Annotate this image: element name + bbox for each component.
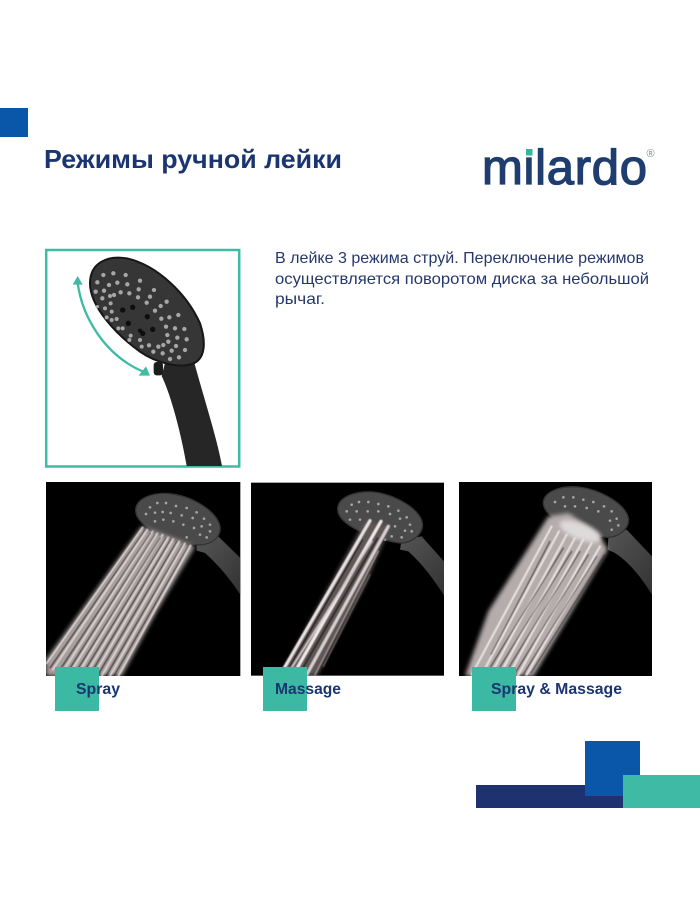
title: Режимы ручной лейки bbox=[44, 144, 342, 174]
photo: spray and massage mode bbox=[459, 482, 652, 676]
icon: shower handle bbox=[162, 357, 222, 466]
logo: milardo: ® bbox=[646, 148, 655, 160]
label: Spray bbox=[55, 667, 120, 711]
label: Spray: Spray bbox=[76, 681, 120, 698]
panel: shower head with rotation arrow bbox=[46, 250, 239, 466]
description text: рычаг. bbox=[275, 291, 325, 308]
decorative corner square bbox=[0, 108, 28, 137]
label: Spray & Massage: Spray & Massage bbox=[491, 681, 622, 698]
label: Massage bbox=[263, 667, 341, 711]
label: Spray & Massage bbox=[472, 667, 622, 711]
logo: milardo: milardo bbox=[482, 141, 647, 195]
label: Massage: Massage bbox=[275, 681, 341, 698]
description text: В лейке 3 режима струй. Переключение режимов bbox=[275, 250, 644, 267]
icon: shower head disc bbox=[90, 258, 204, 366]
photo: spray mode bbox=[46, 482, 240, 676]
description text bbox=[275, 250, 649, 308]
decorative blocks, bottom right bbox=[476, 741, 700, 808]
icon: switch lever bbox=[154, 362, 163, 375]
photo: massage mode bbox=[251, 483, 444, 676]
arrow: rotation direction bbox=[73, 276, 150, 376]
description text: осуществляется поворотом диска за небольшой bbox=[275, 271, 649, 288]
